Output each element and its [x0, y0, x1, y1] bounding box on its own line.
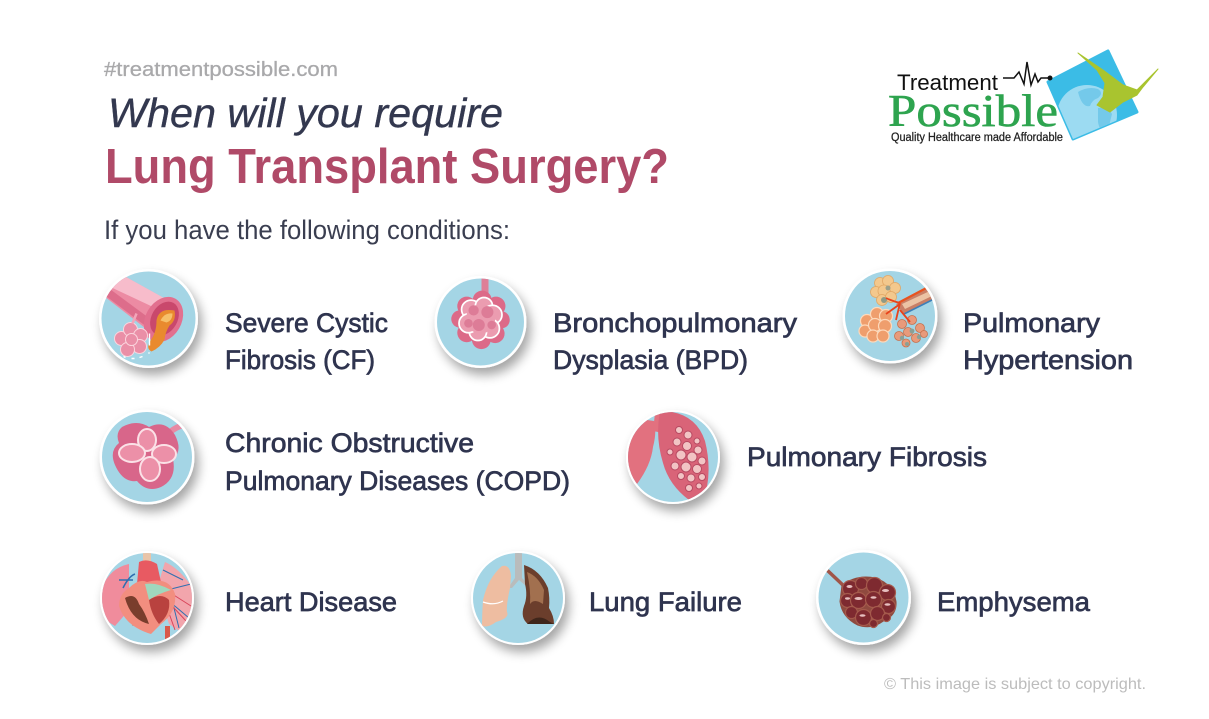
panel: severe cystic fibrosis [99, 269, 388, 375]
logo tagline: Quality Healthcare made Affordable [891, 132, 1063, 144]
label [553, 308, 798, 375]
icon: clover shaped alveolus [100, 410, 194, 504]
icon: airway with mucus [99, 269, 198, 368]
logo heartbeat line [1003, 62, 1050, 85]
icon: healthy and damaged lungs [471, 551, 565, 645]
logo: Treatment Possible [888, 51, 1158, 145]
panel: lung failure [471, 551, 742, 645]
logo word Treatment: Treatment [897, 70, 998, 95]
hashtag website: #treatmentpossible.com [104, 59, 338, 81]
panel: bronchopulmonary dysplasia [434, 276, 798, 375]
panel: pulmonary fibrosis [626, 410, 987, 504]
label: Pulmonary [963, 308, 1101, 338]
icon: alveoli cluster [434, 276, 526, 368]
icon: blood vessels and alveoli [842, 268, 938, 364]
panel: heart disease [100, 551, 397, 645]
label: Hypertension [963, 345, 1133, 375]
logo globe card [1048, 51, 1137, 145]
label: Pulmonary Fibrosis [747, 442, 987, 472]
panel: COPD [100, 410, 570, 504]
title line two: Lung Transplant Surgery? [105, 140, 669, 194]
logo heartbeat dot [1048, 76, 1052, 80]
icon: scarred lungs [626, 410, 720, 504]
icon: heart cross section [100, 551, 194, 645]
panel: emphysema [816, 550, 1091, 645]
title line one: When will you require [108, 90, 503, 136]
subheading: If you have the following conditions: [104, 215, 510, 245]
logo bird [1078, 53, 1158, 112]
label: Emphysema [937, 587, 1091, 617]
label: Lung Failure [589, 587, 742, 617]
label [963, 308, 1133, 375]
label [225, 428, 570, 496]
label [225, 308, 388, 375]
label: Dysplasia (BPD) [553, 345, 748, 375]
copyright note: © This image is subject to copyright. [884, 676, 1146, 693]
logo word Possible: Possible [888, 85, 1058, 136]
label: Severe Cystic [225, 308, 388, 338]
label: Fibrosis (CF) [225, 345, 375, 375]
label: Bronchopulmonary [553, 308, 798, 338]
label: Heart Disease [225, 587, 397, 617]
icon: damaged air sacs [816, 550, 911, 645]
label: Pulmonary Diseases (COPD) [225, 466, 570, 496]
panel: pulmonary hypertension [842, 268, 1133, 375]
label: Chronic Obstructive [225, 428, 474, 458]
